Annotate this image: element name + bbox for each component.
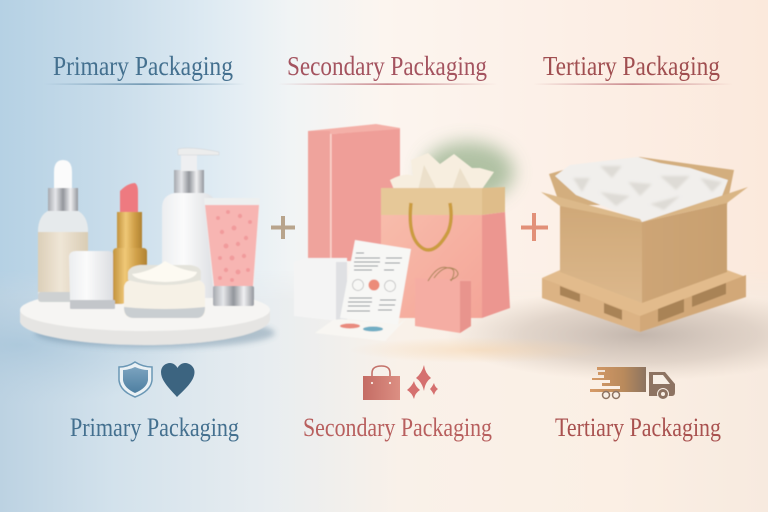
icon: delivery truck — [590, 367, 675, 400]
gift bag — [381, 187, 510, 318]
icon: shopping bag — [363, 366, 400, 400]
title: secondary packaging: Secondary Packaging — [287, 51, 487, 81]
panel: primary packaging products — [20, 148, 275, 348]
cardboard box body — [541, 187, 748, 303]
cream jar — [124, 261, 205, 318]
label: secondary packaging: Secondary Packaging — [303, 413, 492, 442]
white cap — [69, 251, 115, 309]
title: primary packaging: Primary Packaging — [53, 51, 233, 81]
label: tertiary packaging: Tertiary Packaging — [555, 413, 721, 442]
panel: secondary packaging products — [294, 124, 514, 341]
tall pink box — [308, 124, 400, 261]
wooden pallet — [542, 270, 746, 332]
cardboard box back flaps — [549, 157, 734, 205]
title: tertiary packaging: Tertiary Packaging — [543, 51, 720, 81]
pink tube — [204, 198, 260, 306]
label: primary packaging: Primary Packaging — [70, 413, 239, 442]
icon: heart — [161, 363, 194, 397]
green foliage blur — [422, 142, 514, 202]
white box — [294, 258, 347, 322]
marble platform — [20, 289, 275, 348]
leaflet — [315, 240, 411, 341]
tissue paper — [390, 153, 494, 192]
lipstick — [113, 183, 147, 304]
plus sign: second — [521, 213, 548, 241]
pump bottle — [162, 148, 219, 298]
panel: tertiary packaging products — [541, 157, 748, 332]
small shopping bag — [415, 267, 471, 333]
packing peanuts — [555, 157, 728, 222]
plus sign: first — [271, 216, 295, 239]
icon: shield — [119, 362, 152, 397]
icon: sparkles — [407, 365, 438, 399]
dropper bottle — [38, 160, 88, 302]
